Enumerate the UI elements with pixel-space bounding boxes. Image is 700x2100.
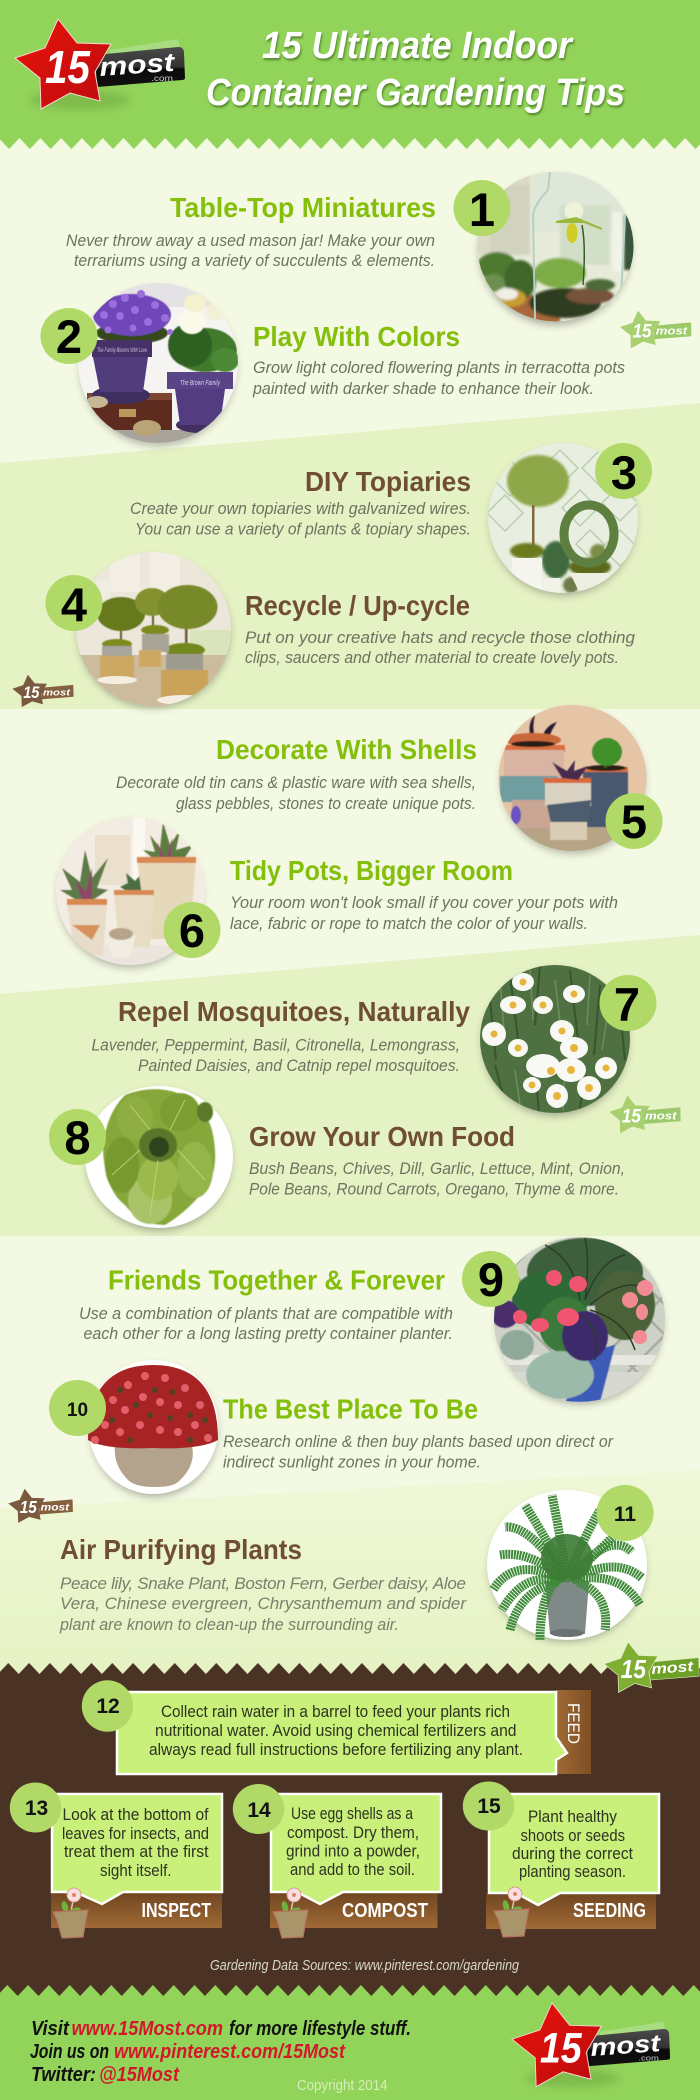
text: tip 2: Grow light colored flowering plants in terracotta pots <box>253 358 625 377</box>
title: 15 Ultimate Indoor <box>262 25 574 67</box>
photo: planter combination <box>490 1232 670 1407</box>
text: tip 9 <box>79 1304 453 1343</box>
photo: red calibrachoa <box>88 1360 218 1497</box>
badge: 3: 3 <box>611 446 637 499</box>
watermark logo: green top: most <box>656 326 688 338</box>
panel: tip 4 recycle up-cycle <box>46 548 636 715</box>
text: tip 1 <box>66 231 435 270</box>
icon: flower pot <box>53 1888 88 1938</box>
panel: tip 9 friends together <box>79 1232 670 1407</box>
panel: tip 13 inspect <box>10 1782 222 1938</box>
badge: 12: 12 <box>96 1695 120 1718</box>
badge: 3 <box>595 443 652 499</box>
text: tip 15: Plant healthy <box>528 1808 618 1826</box>
logo: 15most header <box>15 19 185 110</box>
text: tip 1: Never throw away a used mason jar! Make your own <box>66 231 435 250</box>
logo: large green <box>604 1642 699 1692</box>
badge: 12 <box>82 1680 133 1732</box>
heading: tip 10: The Best Place To Be <box>223 1394 478 1424</box>
watermark logo: green mid: 15 <box>622 1106 641 1127</box>
badge: 10 <box>49 1380 106 1436</box>
photo: lettuce <box>85 1086 233 1231</box>
logo: 15most header: most <box>98 47 177 82</box>
heading: tip 6: Tidy Pots, Bigger Room <box>230 855 513 886</box>
text: tip 14: grind into a powder, <box>286 1842 420 1860</box>
text: tip 13: sight itself. <box>100 1862 172 1880</box>
badge: 13: 13 <box>25 1797 48 1820</box>
text: tip 12: Collect rain water in a barrel to feed your plants rich <box>161 1703 510 1721</box>
text: tip 5 <box>116 773 476 813</box>
watermark logo: brown lower: most <box>41 1502 70 1513</box>
badge: 4: 4 <box>61 578 87 631</box>
title <box>206 25 625 114</box>
footer links: www.15Most.com <box>72 2018 223 2040</box>
text: tip 11: Peace lily, Snake Plant, Boston Fern, Gerber daisy, Aloe <box>60 1574 466 1593</box>
badge: 6: 6 <box>179 904 205 957</box>
panel: tip 15 seeding <box>463 1782 659 1937</box>
heading: tip 9: Friends Together & Forever <box>108 1264 445 1296</box>
panel: tip 1 table-top miniatures <box>66 165 640 330</box>
tab: feed <box>556 1690 591 1774</box>
text: tip 3: Create your own topiaries with galvanized wires. <box>130 499 471 518</box>
watermark logo: brown left <box>12 675 74 707</box>
tab: inspect: INSPECT <box>142 1900 211 1922</box>
panel: tip 3 diy topiaries <box>130 440 652 600</box>
panel: tip 10 best place <box>49 1360 614 1497</box>
badge: 8 <box>49 1109 106 1165</box>
tab: compost: COMPOST <box>342 1900 428 1922</box>
panel: tip 14 compost <box>233 1784 441 1938</box>
callout box: tip 13 <box>52 1794 222 1904</box>
heading: tip 11: Air Purifying Plants <box>60 1534 302 1565</box>
text: tip 12 <box>149 1703 523 1759</box>
badge: 10: 10 <box>67 1400 88 1421</box>
footer links: Visit <box>31 2018 70 2040</box>
callout box: tip 12 <box>117 1692 567 1774</box>
text: tip 7 <box>92 1036 460 1075</box>
text: tip 6: lace, fabric or rope to match the color of your walls. <box>230 914 588 933</box>
text: tip 13: Look at the bottom of <box>62 1806 209 1824</box>
logo: 15most header: .com <box>151 74 173 83</box>
badge: 9: 9 <box>478 1253 504 1306</box>
text: tip 9: each other for a long lasting pretty container planter. <box>84 1324 453 1343</box>
watermark logo: green mid: most <box>645 1110 677 1122</box>
photo: topiary pots <box>70 548 240 715</box>
logo: 15most header: 15 <box>45 41 91 93</box>
heading: tip 7: Repel Mosquitoes, Naturally <box>118 996 471 1027</box>
photo: boston fern <box>487 1490 647 1642</box>
logo: 15most footer: .com <box>638 2054 659 2063</box>
footer links: for more lifestyle stuff. <box>229 2018 411 2040</box>
text: tip 3 <box>130 499 471 538</box>
watermark logo: brown left: most <box>43 687 71 697</box>
text: tip 8: Pole Beans, Round Carrots, Oregano, Thyme & more. <box>249 1180 619 1198</box>
text: tip 15: shoots or seeds <box>520 1827 625 1845</box>
photo: daisies <box>475 960 635 1120</box>
badge: 11 <box>596 1485 654 1541</box>
text: tip 10 <box>223 1432 614 1472</box>
watermark logo: brown lower: 15 <box>20 1497 37 1517</box>
text: tip 13: leaves for insects, and <box>62 1825 209 1843</box>
heading: tip 8: Grow Your Own Food <box>249 1121 515 1152</box>
text: tip 12: nutritional water. Avoid using chemical fertilizers and <box>155 1722 516 1740</box>
text: tip 5: Decorate old tin cans & plastic ware with sea shells, <box>116 773 476 792</box>
badge: 2 <box>40 308 98 364</box>
text: tip 12: always read full instructions before fertilizing any plant. <box>149 1741 523 1759</box>
text: tip 4 <box>245 628 636 667</box>
watermark logo: green mid <box>609 1095 681 1133</box>
watermark logo: brown left: 15 <box>23 683 40 702</box>
icon: flower pot <box>273 1888 308 1938</box>
footer links: @15Most <box>99 2064 180 2086</box>
text: tip 14 <box>286 1805 420 1879</box>
heading: tip 1: Table-Top Miniatures <box>170 192 436 223</box>
badge: 8: 8 <box>64 1111 91 1164</box>
title: Container Gardening Tips <box>206 72 625 114</box>
text: tip 3: You can use a variety of plants & topiary shapes. <box>135 520 471 538</box>
panel: tip 2 play with colors <box>40 280 625 450</box>
text: tip 11 <box>59 1574 467 1634</box>
heading: tip 2: Play With Colors <box>253 321 460 352</box>
badge: 5 <box>606 793 662 849</box>
photo: terrarium jar <box>470 165 640 330</box>
text: tip 14: compost. Dry them, <box>287 1824 419 1842</box>
text: tip 14: Use egg shells as a <box>291 1805 414 1823</box>
watermark logo: brown lower <box>8 1489 73 1523</box>
text: tip 4: clips, saucers and other material to create lovely pots. <box>245 648 619 667</box>
footer links: Twitter: <box>31 2064 96 2086</box>
text: tip 6: Your room won't look small if you cover your pots with <box>230 893 618 912</box>
icon: flower pot <box>494 1887 529 1937</box>
photo: covered pots <box>54 817 206 972</box>
data sources note: Gardening Data Sources: www.pinterest.com/gardening <box>210 1958 519 1974</box>
badge: 15 <box>463 1782 514 1830</box>
text: tip 4: Put on your creative hats and recycle those clothing <box>245 628 636 647</box>
badge: 15: 15 <box>477 1795 501 1818</box>
badge: 7 <box>600 975 656 1031</box>
panel: tip 5 decorate with shells <box>116 700 662 855</box>
panel: tip 6 tidy pots <box>50 812 618 975</box>
text: tip 11: plant are known to clean-up the surrounding air. <box>59 1615 399 1634</box>
badge: 11: 11 <box>614 1503 636 1526</box>
text: tip 8 <box>249 1159 625 1198</box>
text: tip 2 <box>252 358 625 398</box>
panel: tip 11 air purifying plants <box>59 1485 653 1642</box>
badge: 7: 7 <box>614 978 640 1031</box>
footer band <box>0 1985 700 2100</box>
text: tip 10: indirect sunlight zones in your home. <box>223 1452 481 1472</box>
badge: 14: 14 <box>247 1799 271 1822</box>
footer links: Join us on <box>30 2041 109 2063</box>
text: tip 15: planting season. <box>519 1863 626 1881</box>
callout box: tip 15 <box>489 1794 659 1905</box>
logo: 15most footer: 15 <box>540 2024 583 2072</box>
badge: 1: 1 <box>469 183 495 236</box>
text: tip 7: Lavender, Peppermint, Basil, Citronella, Lemongrass, <box>92 1036 460 1054</box>
text: tip 9: Use a combination of plants that are compatible with <box>79 1304 453 1323</box>
heading: tip 4: Recycle / Up-cycle <box>245 590 470 621</box>
logo: large green: most <box>651 1659 695 1678</box>
tab: compost <box>270 1892 438 1928</box>
watermark logo: green top: 15 <box>633 321 652 342</box>
text: tip 11: Vera, Chinese evergreen, Chrysanthemum and spider <box>60 1594 467 1613</box>
tab: feed: FEED <box>564 1703 583 1744</box>
text: tip 14: and add to the soil. <box>290 1861 415 1879</box>
badge: 5: 5 <box>621 795 647 848</box>
copyright: Copyright 2014 <box>297 2078 388 2094</box>
text: tip 7: Painted Daisies, and Catnip repel mosquitoes. <box>138 1056 460 1075</box>
text: tip 2: painted with darker shade to enhance their look. <box>252 379 594 398</box>
photo: topiary wreath <box>485 440 645 600</box>
panel: tip 8 grow your own food <box>49 1086 625 1231</box>
logo: 15most footer: most <box>590 2030 662 2062</box>
text: tip 5: glass pebbles, stones to create unique pots. <box>176 794 476 813</box>
badge: 4 <box>46 575 102 631</box>
photo: purple pots: The Brown Family <box>180 380 220 387</box>
photo: purple pots <box>75 280 245 450</box>
watermark logo: green top <box>620 311 691 348</box>
text: tip 13 <box>62 1806 209 1880</box>
callout box: tip 14 <box>271 1794 441 1904</box>
tab: seeding <box>486 1893 656 1929</box>
brown tips background <box>0 1663 700 1996</box>
badge: 1 <box>454 180 510 236</box>
text: tip 10: Research online & then buy plants based upon direct or <box>223 1432 614 1451</box>
tab: seeding: SEEDING <box>573 1900 646 1922</box>
text: tip 15 <box>512 1808 633 1881</box>
photo: pebble pots <box>490 700 655 855</box>
panel: tip 7 repel mosquitoes <box>92 960 656 1120</box>
heading: tip 5: Decorate With Shells <box>216 734 477 765</box>
text: tip 15: during the correct <box>512 1845 633 1863</box>
header band <box>0 0 700 149</box>
badge: 2: 2 <box>56 310 82 363</box>
text: tip 6 <box>230 893 618 933</box>
badge: 14 <box>233 1784 284 1834</box>
badge: 6 <box>164 902 220 958</box>
badge: 13 <box>10 1782 61 1832</box>
logo: 15most footer <box>512 2003 670 2088</box>
panel: tip 12 feed <box>82 1680 591 1774</box>
heading: tip 3: DIY Topiaries <box>305 466 471 497</box>
footer links <box>30 2018 411 2086</box>
photo: purple pots: The Family Blooms With Love <box>97 348 147 354</box>
logo: large green: 15 <box>621 1656 647 1684</box>
page background bands <box>0 138 700 1680</box>
tab: inspect <box>51 1892 222 1928</box>
text: tip 8: Bush Beans, Chives, Dill, Garlic, Lettuce, Mint, Onion, <box>249 1159 625 1178</box>
text: tip 1: terrariums using a variety of succulents & elements. <box>74 251 435 270</box>
text: tip 13: treat them at the first <box>64 1843 209 1861</box>
badge: 9 <box>462 1251 519 1307</box>
footer links: www.pinterest.com/15Most <box>114 2041 346 2063</box>
